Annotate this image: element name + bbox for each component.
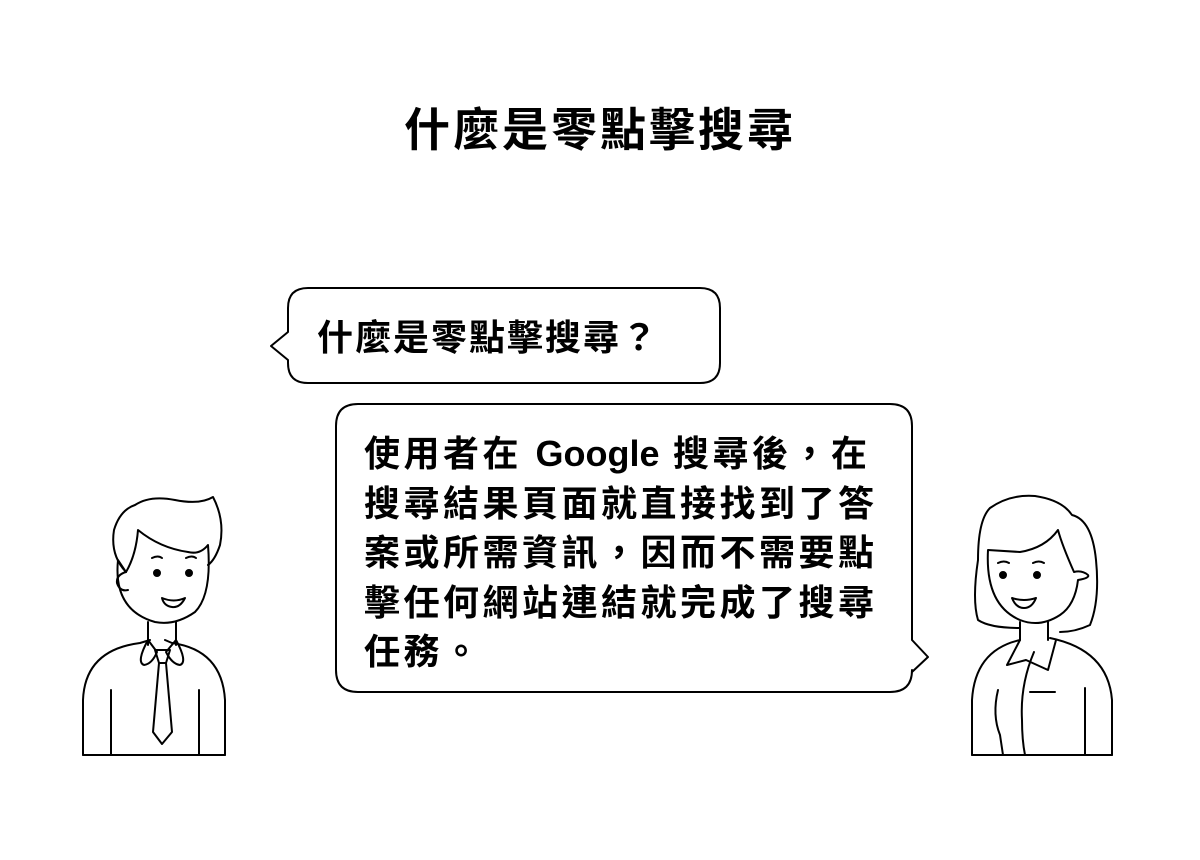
answer text: 擊任何網站連結就完成了搜尋: [364, 582, 878, 622]
character: man: [83, 497, 225, 755]
bubble: answer: [336, 404, 928, 692]
question text: 什麼是零點擊搜尋？: [317, 317, 659, 358]
answer text: 搜尋結果頁面就直接找到了答: [364, 482, 878, 524]
answer text: [364, 433, 878, 672]
answer text: 任務。: [364, 631, 483, 672]
bubble: question: [271, 288, 720, 383]
character: woman: [972, 496, 1112, 755]
answer text: 案或所需資訊，因而不需要點: [364, 532, 878, 573]
answer text: 使用者在 Google 搜尋後，在: [364, 433, 871, 474]
title: 什麼是零點擊搜尋: [404, 104, 796, 156]
